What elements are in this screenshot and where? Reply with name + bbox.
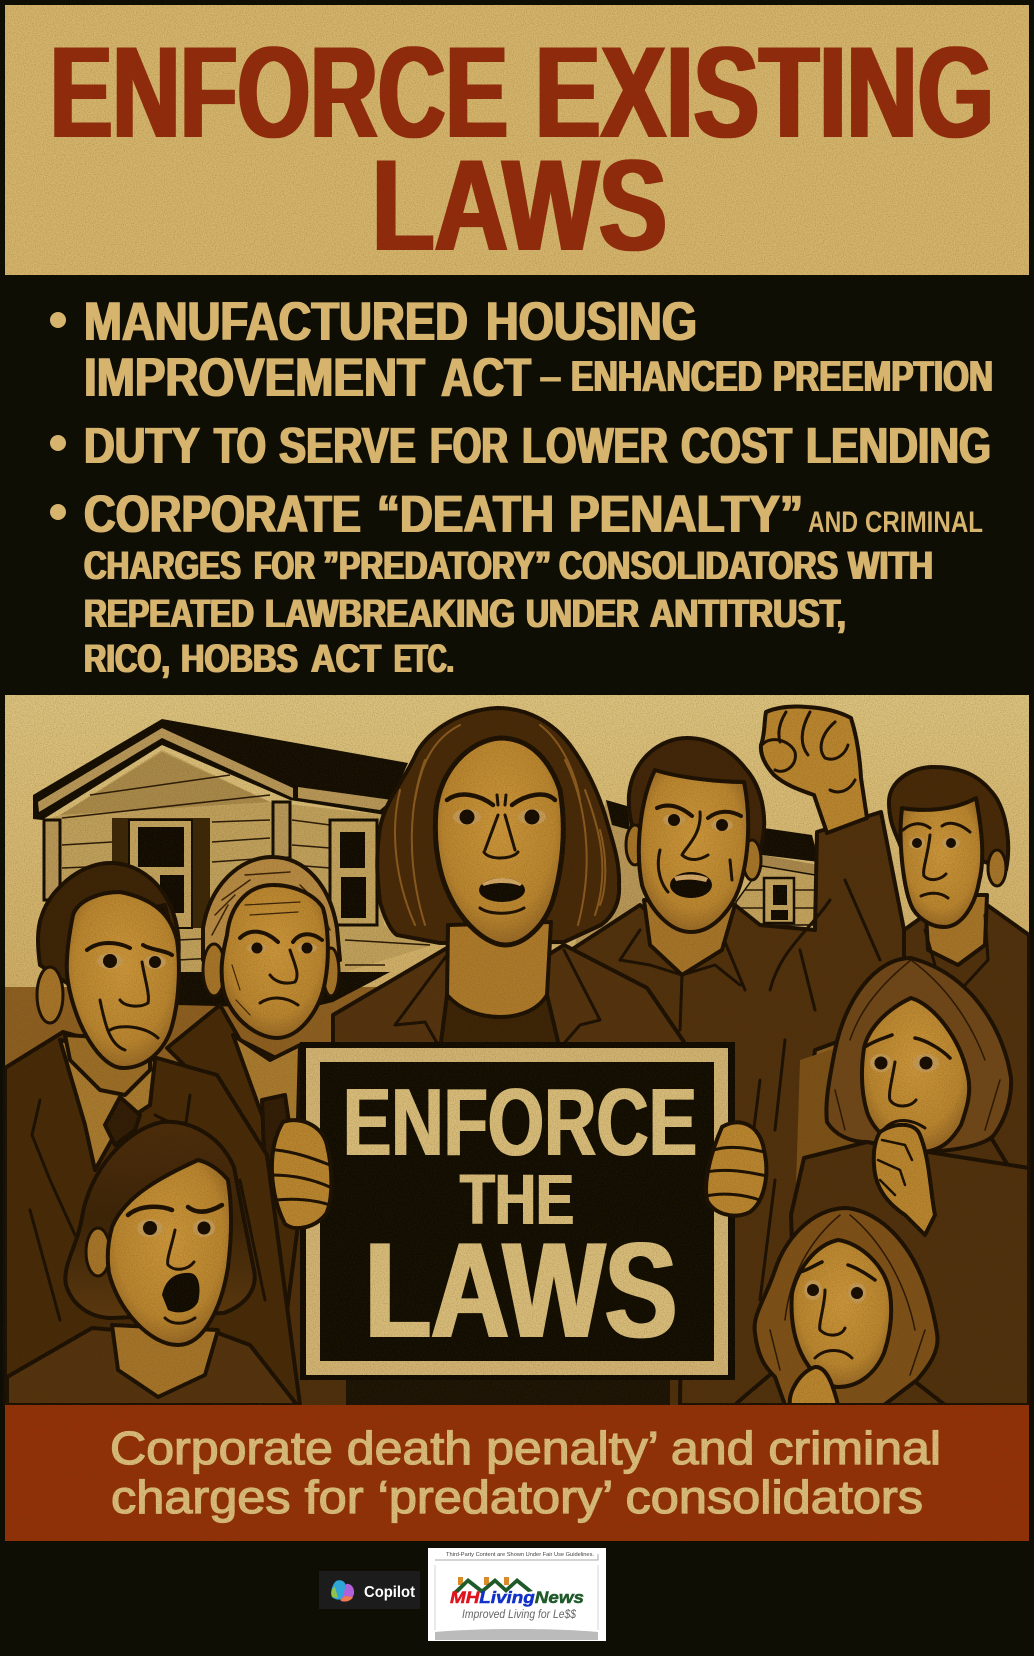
heading: enforce existing laws: ENFORCE [50, 19, 508, 165]
left hand [272, 1120, 332, 1228]
main manufactured home [33, 719, 433, 1010]
bullet 3: WITH [848, 544, 933, 588]
bullet 1: MANUFACTURED [84, 290, 468, 352]
bullet 2 [50, 417, 991, 474]
banner caption text [110, 1422, 941, 1523]
bullet 3 [50, 485, 983, 681]
person: man at far right [889, 767, 1029, 1200]
right hand [706, 1122, 767, 1216]
person: older man in suit [167, 857, 340, 1405]
banner background [5, 1405, 1029, 1541]
tagline: Improved Living for Le$$ [462, 1607, 576, 1621]
bullet 3: CHARGES [84, 544, 241, 588]
background panel behind right woman [795, 1045, 867, 1215]
protest sign [272, 1042, 767, 1380]
bullet 3: LAWBREAKING [265, 592, 515, 636]
sign text: THE [460, 1161, 574, 1240]
bullet 2: DUTY [84, 417, 200, 474]
title panel [5, 5, 1029, 278]
copilot badge [319, 1571, 420, 1609]
bullet 3: ACT [311, 637, 381, 681]
bullet 3: REPEATED [84, 592, 254, 636]
sign board [300, 1042, 735, 1380]
bullet 2: COST [681, 417, 792, 474]
panel: red caption banner [5, 1405, 1029, 1541]
bullet 3: FOR [254, 544, 315, 588]
ground [5, 987, 1029, 1107]
person: shouting man with raised fist [571, 707, 904, 1405]
bullet 1: ENHANCED [571, 352, 762, 401]
heading: enforce existing laws [50, 19, 994, 278]
bullet 3: PENALTY” [569, 485, 803, 544]
banner caption text: Corporate death penalty’ and criminal [110, 1422, 941, 1474]
sign text: ENFORCE [343, 1069, 697, 1176]
bullet 3: AND [808, 506, 858, 539]
person: young woman at lower left [7, 1122, 297, 1405]
icon: roofs and chimneys [453, 1577, 533, 1594]
logo wordmark: MHLiving News [450, 1588, 584, 1607]
bullet 1: ACT [441, 346, 531, 408]
bullet 3: “DEATH [377, 485, 554, 544]
bullet 3: ETC. [394, 637, 454, 681]
second home at right [575, 800, 822, 945]
sign text [343, 1069, 697, 1366]
panel: protest illustration [5, 695, 1029, 1405]
card shadow [435, 1629, 598, 1640]
bullet 3: HOBBS [181, 637, 298, 681]
banner caption text: charges for ‘predatory’ consolidators [111, 1471, 923, 1523]
MHLivingNews logo card [428, 1548, 606, 1641]
person: woman at lower right [735, 1208, 945, 1405]
bullet 3: CORPORATE [84, 485, 361, 544]
bullet 2: LENDING [806, 417, 991, 474]
bullet 1: IMPROVEMENT [84, 346, 425, 408]
bullet 2: SERVE [279, 417, 416, 474]
bullet 3: UNDER [526, 592, 639, 636]
fair use note: Third-Party Content are Shown Under Fair Use Guidelines. [446, 1552, 594, 1558]
icon: copilot [331, 1580, 354, 1602]
person: man at left [5, 863, 300, 1405]
bullet 1 [50, 290, 993, 408]
hand at mouth [874, 1125, 935, 1235]
title panel background [5, 5, 1029, 275]
heading: enforce existing laws: LAWS [372, 132, 667, 278]
person: central woman [333, 708, 684, 1100]
bullet 3: CONSOLIDATORS [559, 544, 838, 588]
bullet 2: LOWER [522, 417, 668, 474]
sky [5, 695, 1029, 995]
sign text: LAWS [365, 1214, 677, 1366]
bullet 1: – [540, 352, 561, 401]
bullet 3: CRIMINAL [865, 506, 983, 539]
bullet 3: ANTITRUST, [650, 592, 846, 636]
bullet 2: FOR [430, 417, 508, 474]
cover below sign [346, 1375, 670, 1405]
person: woman at right, hand to mouth [791, 958, 1029, 1405]
bullet 2: TO [214, 417, 266, 474]
raised fist [761, 707, 867, 833]
bullet 3: ”PREDATORY” [323, 544, 551, 588]
bullet list [50, 290, 993, 681]
base of crowd clothing [5, 1090, 1029, 1405]
copilot badge: Copilot [364, 1584, 415, 1601]
bullet 3: RICO, [84, 637, 170, 681]
bullet 1: HOUSING [486, 290, 697, 352]
